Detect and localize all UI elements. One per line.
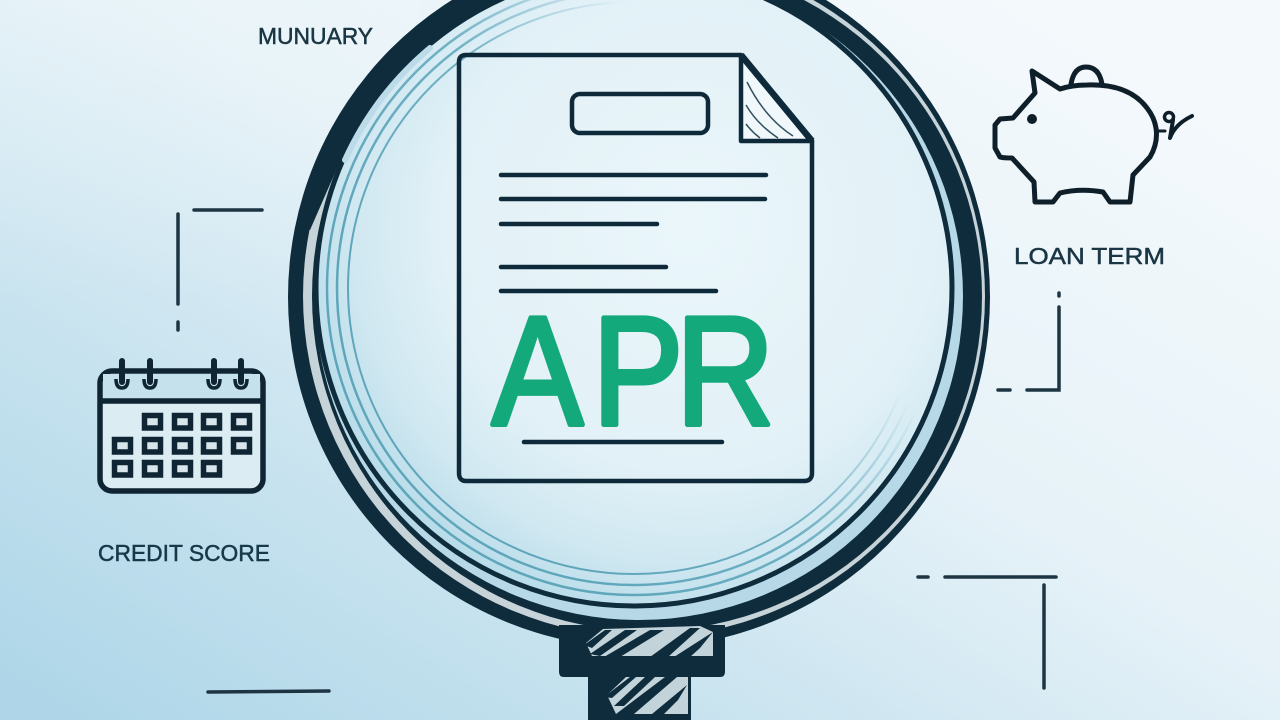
magnifying glass lens bbox=[288, 0, 990, 648]
bracket: upper left bbox=[178, 210, 262, 330]
label: credit score: CREDIT SCORE bbox=[98, 540, 270, 566]
text lines bbox=[501, 175, 766, 442]
title box bbox=[572, 94, 708, 133]
APR heading: APR bbox=[492, 284, 774, 457]
piggy bank icon bbox=[995, 67, 1192, 202]
bracket: right bbox=[998, 293, 1059, 390]
line: lower left bbox=[208, 691, 329, 692]
calendar icon bbox=[100, 361, 264, 491]
label: munuary: MUNUARY bbox=[258, 23, 373, 49]
document icon bbox=[459, 55, 812, 481]
label: loan term: LOAN TERM bbox=[1014, 243, 1165, 269]
magnifying glass handle bbox=[559, 625, 725, 720]
bracket: lower right bbox=[918, 577, 1056, 688]
folded corner bbox=[741, 55, 812, 141]
